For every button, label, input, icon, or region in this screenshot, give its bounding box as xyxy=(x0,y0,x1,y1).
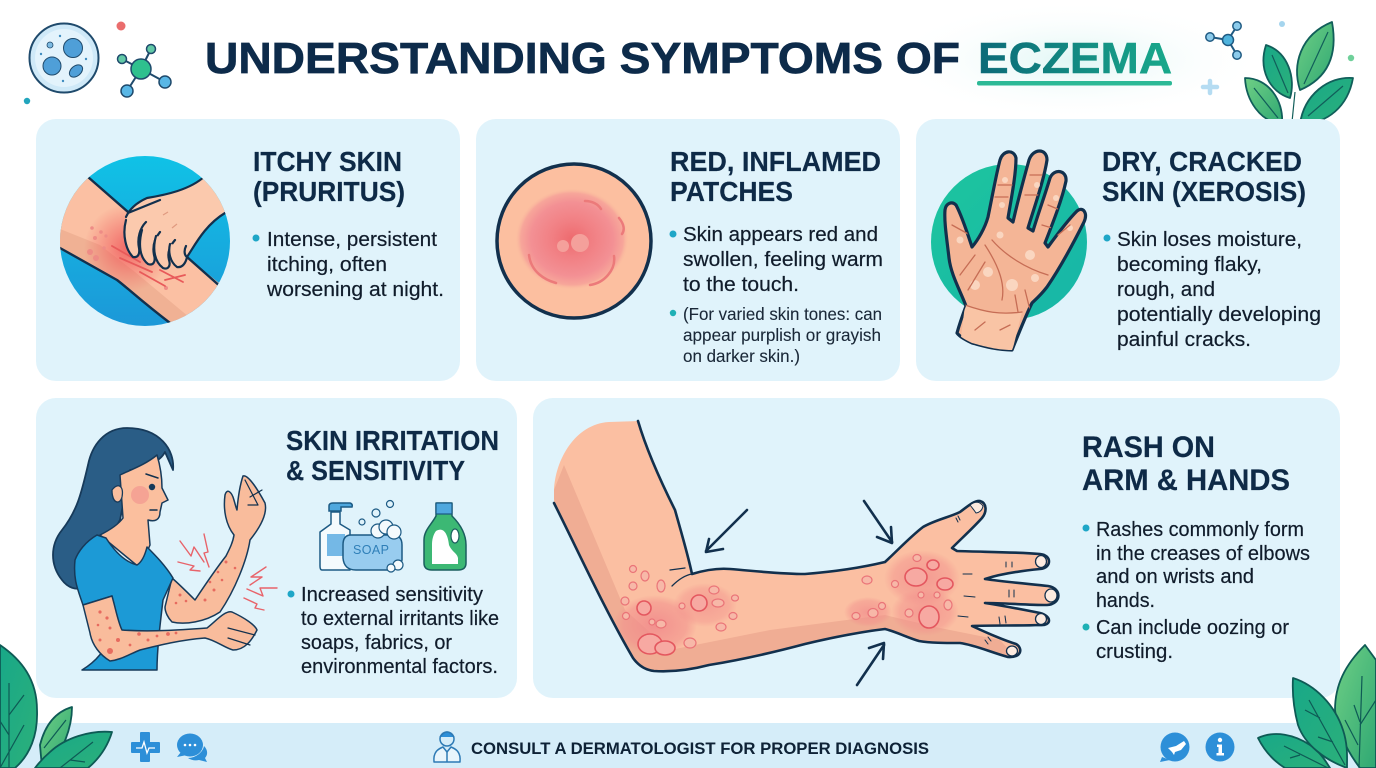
note on varied skin tones xyxy=(670,304,882,366)
icon: detergent bottle xyxy=(424,503,466,570)
icon: chat bubbles xyxy=(177,734,207,762)
icon: microbe petri dish xyxy=(30,24,98,92)
icon: molecule right xyxy=(1206,22,1241,59)
heading xyxy=(286,425,499,486)
illustration: inflamed skin patch xyxy=(497,164,651,318)
illustration: cracked hand xyxy=(931,151,1087,352)
icon: speech bird xyxy=(1160,732,1190,762)
footer bar xyxy=(0,723,1376,768)
icon: leaves bottom left xyxy=(0,645,112,768)
body text: Increased sensitivity xyxy=(301,583,484,606)
panel: dry cracked skin xyxy=(916,119,1340,381)
panel: rash on arm and hands xyxy=(533,398,1340,698)
heading: & SENSITIVITY xyxy=(286,455,465,486)
heading: (PRURITUS) xyxy=(253,176,405,207)
heading: RASH ON xyxy=(1082,431,1215,464)
body text xyxy=(670,223,883,296)
heading: ARM & HANDS xyxy=(1082,464,1290,497)
heading: DRY, CRACKED xyxy=(1102,146,1302,177)
illustration: scratching arm xyxy=(60,156,230,326)
body text xyxy=(252,228,444,301)
body text: hands. xyxy=(1096,589,1155,612)
body text: environmental factors. xyxy=(301,655,498,678)
panel: skin irritation and sensitivity xyxy=(36,398,517,698)
arrow: wrist top xyxy=(864,501,892,543)
body text: potentially developing xyxy=(1117,303,1321,326)
body text: becoming flaky, xyxy=(1117,253,1262,276)
title: UNDERSTANDING SYMPTOMS OF xyxy=(205,34,960,83)
body text: rough, and xyxy=(1117,278,1215,301)
decorative sparkles xyxy=(1203,21,1354,93)
heading: PATCHES xyxy=(670,176,793,207)
body text: and on wrists and xyxy=(1096,565,1254,588)
body text: Skin appears red and xyxy=(683,223,878,246)
icon: leaves top right xyxy=(1245,22,1353,124)
heading xyxy=(670,146,881,207)
icon: soap and pump bottle xyxy=(320,500,403,572)
body text: to the touch. xyxy=(683,273,799,296)
heading: RED, INFLAMED xyxy=(670,146,881,177)
heading xyxy=(253,146,405,207)
heading xyxy=(1082,431,1290,497)
body text: in the creases of elbows xyxy=(1096,542,1310,565)
note on varied skin tones: on darker skin.) xyxy=(683,346,800,366)
body text: Skin loses moisture, xyxy=(1117,228,1302,251)
heading: ITCHY SKIN xyxy=(253,146,402,177)
note on varied skin tones: appear purplish or grayish xyxy=(683,325,881,345)
arrow: wrist bottom xyxy=(857,643,884,685)
arrow: elbow xyxy=(706,510,747,552)
body text: swollen, feeling warm xyxy=(683,248,883,271)
icon: leaves bottom right xyxy=(1258,645,1376,768)
decorative dot red xyxy=(116,22,126,30)
body text xyxy=(288,583,499,678)
title: ECZEMA xyxy=(978,34,1172,83)
body text xyxy=(1104,228,1321,351)
body text: to external irritants like xyxy=(301,607,499,630)
illustration: woman with irritated arms xyxy=(53,428,277,670)
body text: worsening at night. xyxy=(266,278,444,301)
illustration: arm with rash xyxy=(552,421,1058,680)
icon: molecule left xyxy=(118,44,171,97)
footer message: CONSULT A DERMATOLOGIST FOR PROPER DIAGNOSIS xyxy=(471,740,929,758)
icon: info xyxy=(1206,732,1234,762)
heading xyxy=(1102,146,1306,207)
body text: crusting. xyxy=(1096,640,1173,663)
body text: soaps, fabrics, or xyxy=(301,631,452,654)
icon: medical cross xyxy=(131,732,160,762)
icon: soap and pump bottle: SOAP xyxy=(353,543,389,557)
body text: Rashes commonly form xyxy=(1096,518,1304,541)
heading: SKIN IRRITATION xyxy=(286,425,499,456)
panel: itchy skin xyxy=(36,119,460,381)
body text: painful cracks. xyxy=(1117,328,1251,351)
note on varied skin tones: (For varied skin tones: can xyxy=(683,304,882,324)
panel: red inflamed patches xyxy=(476,119,900,381)
body text: Can include oozing or xyxy=(1096,616,1289,639)
body text: itching, often xyxy=(267,253,387,276)
body text xyxy=(1082,518,1310,663)
title glow xyxy=(885,0,1265,120)
body text: Intense, persistent xyxy=(267,228,437,251)
icon: doctor xyxy=(434,732,460,762)
decorative dot teal xyxy=(24,98,30,104)
heading: SKIN (XEROSIS) xyxy=(1102,176,1306,207)
